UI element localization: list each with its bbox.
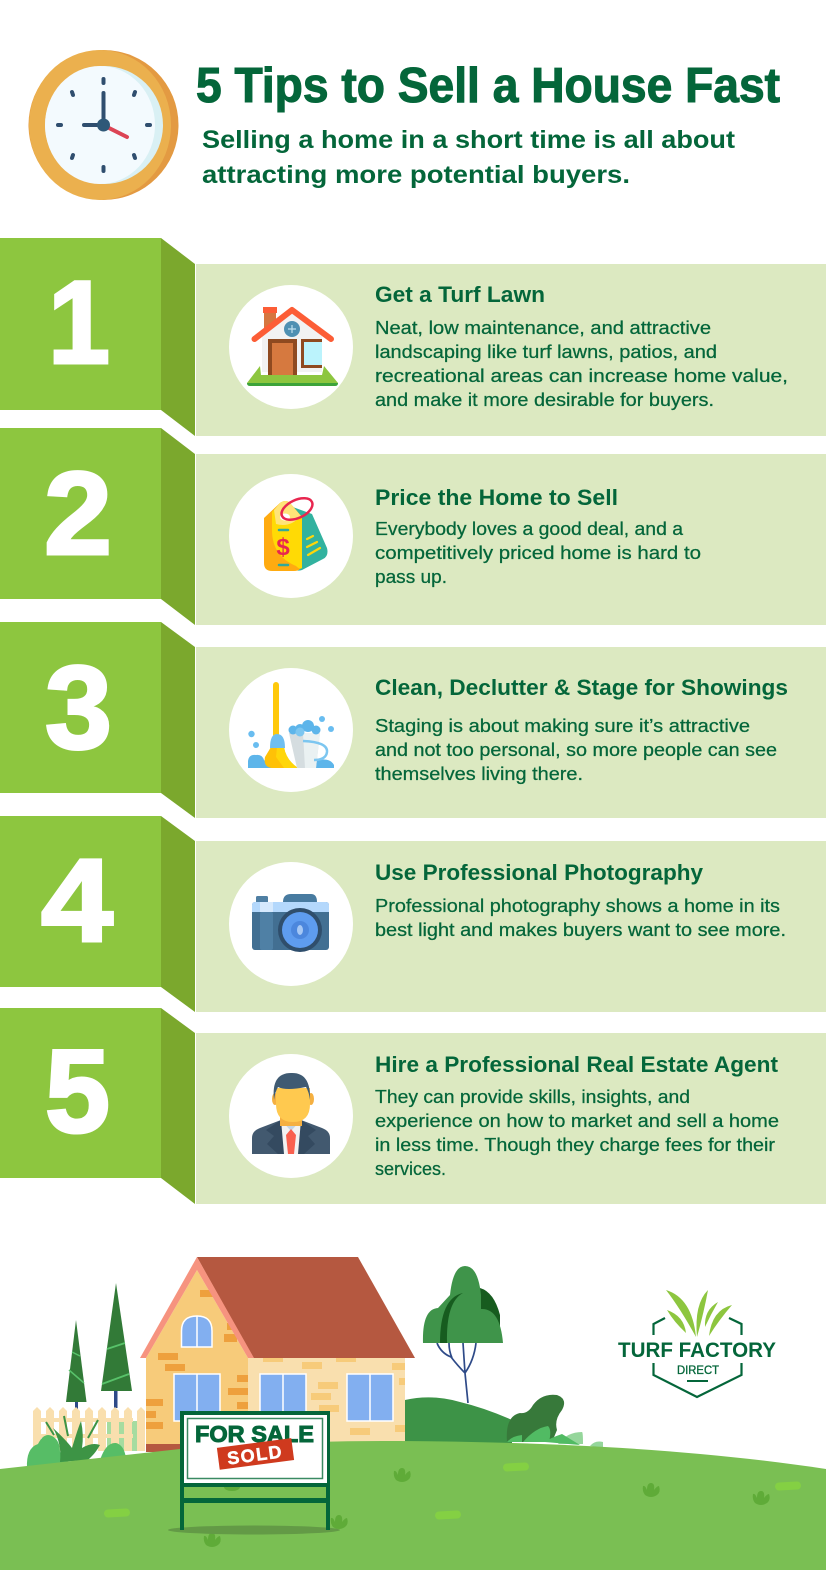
number block 3 [0, 622, 195, 818]
logo wordmark [618, 1339, 776, 1382]
icon: price tags [264, 494, 328, 571]
number block 1: 1 [48, 257, 110, 389]
tip 3 text: Staging is about making sure it’s attractive [375, 716, 750, 736]
tip 2 text: pass up. [375, 567, 447, 587]
number block 2 [0, 428, 195, 625]
trees left [66, 1283, 132, 1410]
tip 1 text: and make it more desirable for buyers. [375, 390, 714, 410]
number block 4: 4 [41, 835, 113, 967]
panel: tip 4 [0, 816, 826, 1012]
ground [0, 1441, 826, 1570]
tip 3 text: Clean, Declutter & Stage for Showings [375, 675, 788, 700]
sold banner [217, 1438, 294, 1470]
for sale sign: FOR SALE [195, 1421, 314, 1447]
icon: price tags: $ [276, 534, 290, 561]
subtitle: attracting more potential buyers. [202, 161, 630, 189]
tip 2 text: Price the Home to Sell [375, 485, 618, 510]
logo wordmark: DIRECT [677, 1365, 719, 1377]
tip 3 text: and not too personal, so more people can see [375, 740, 777, 760]
tip 1 text: landscaping like turf lawns, patios, and [375, 342, 717, 362]
panel: tip 1 [0, 238, 826, 436]
sold banner: SOLD [226, 1441, 284, 1469]
tip 5 text: in less time. Though they charge fees for their [375, 1135, 775, 1155]
tip 1 text: Neat, low maintenance, and attractive [375, 318, 711, 338]
title: 5 Tips to Sell a House Fast [196, 59, 780, 113]
panel: tip 2 [0, 428, 826, 625]
illustration: house scene [0, 1257, 826, 1570]
tip 5 text [375, 1052, 779, 1179]
tip 4 text [375, 860, 786, 940]
number block 3: 3 [45, 642, 112, 774]
icon: real estate agent [252, 1073, 330, 1154]
tip 5 text: experience on how to market and sell a home [375, 1111, 779, 1131]
tip 1 text: recreational areas can increase home value, [375, 366, 788, 386]
subtitle: Selling a home in a short time is all about [202, 126, 736, 154]
panel: tip 5 [0, 1008, 826, 1204]
subtitle [202, 126, 736, 189]
logo: Turf Factory Direct [618, 1290, 776, 1397]
logo hexagon [654, 1318, 742, 1397]
tip 2 text [375, 485, 701, 587]
grass highlights [104, 1462, 801, 1520]
icon: house with lawn [247, 307, 338, 386]
tip 2 text: Everybody loves a good deal, and a [375, 519, 684, 539]
tip 3 text: themselves living there. [375, 764, 583, 784]
tip 5 text: They can provide skills, insights, and [375, 1087, 690, 1107]
tip 2 text: competitively priced home is hard to [375, 543, 701, 563]
number block 2: 2 [44, 448, 112, 580]
icon: clock [28, 50, 178, 200]
header [28, 50, 780, 200]
tip 5 text: Hire a Professional Real Estate Agent [375, 1052, 779, 1077]
hill and tree right [405, 1266, 603, 1448]
number block 5 [0, 1008, 195, 1204]
tip 4 text: Professional photography shows a home in its [375, 896, 780, 916]
logo grass [666, 1290, 732, 1337]
icon: camera [252, 894, 329, 952]
number block 5: 5 [45, 1026, 110, 1158]
tip 5 text: services. [375, 1159, 446, 1179]
grass tufts [204, 1468, 770, 1547]
tip 1 text: Get a Turf Lawn [375, 282, 545, 307]
logo wordmark: TURF FACTORY [618, 1339, 776, 1362]
panel: tip 3 [0, 622, 826, 818]
for sale sign [168, 1411, 340, 1534]
house [140, 1257, 415, 1452]
tip 3 text [375, 675, 788, 784]
number block 1 [0, 238, 195, 436]
icon: broom and bucket [248, 682, 334, 768]
number block 4 [0, 816, 195, 1012]
tip 4 text: best light and makes buyers want to see more. [375, 920, 786, 940]
fence [33, 1407, 145, 1451]
tip 4 text: Use Professional Photography [375, 860, 704, 885]
shrubs [27, 1416, 126, 1468]
tip 1 text [375, 282, 788, 410]
